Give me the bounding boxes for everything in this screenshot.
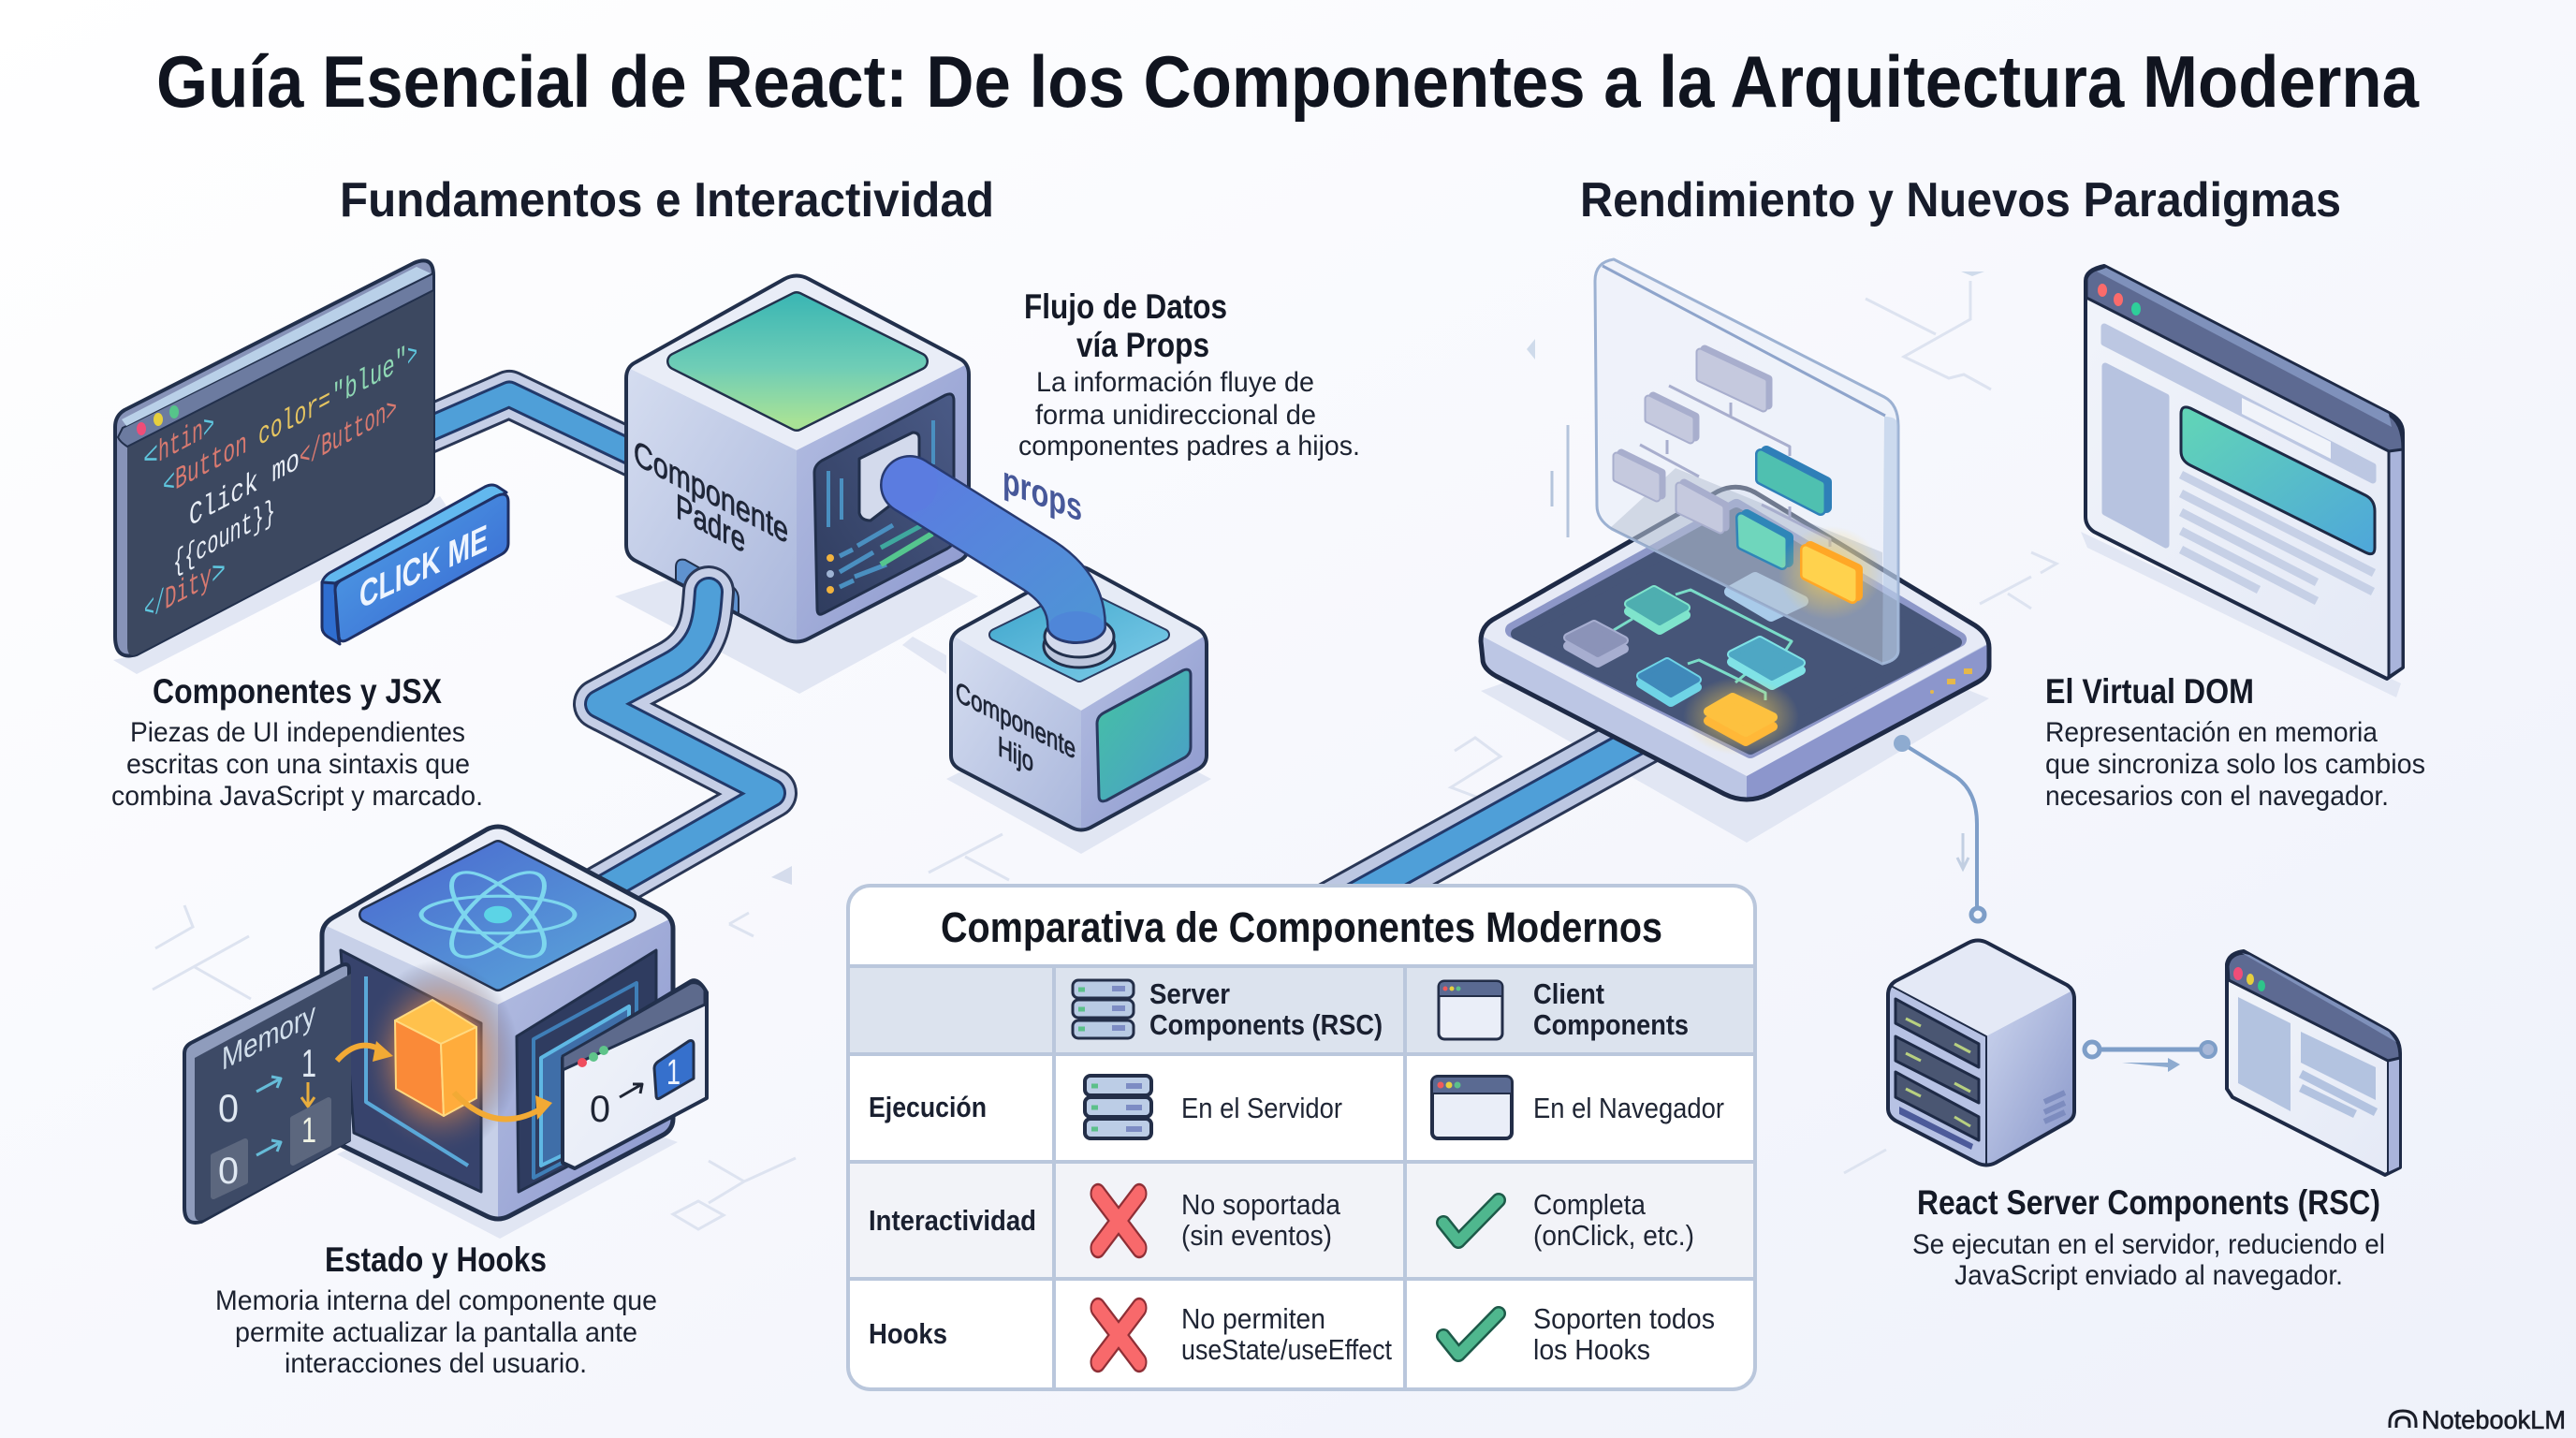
label: componente hijo: Hijo <box>998 729 1033 779</box>
text block: virtual dom: Representación en memoria <box>2045 717 2378 748</box>
tree node: dark teal <box>1761 451 1826 510</box>
text block: estado y hooks: Estado y Hooks <box>325 1240 547 1279</box>
row: hooks: useState/useEffect <box>1181 1333 1392 1366</box>
icon: click me button <box>322 485 508 644</box>
text block: flujo de datos: componentes padres a hijos. <box>1018 431 1360 462</box>
text block: virtual dom: que sincroniza solo los cambios <box>2045 749 2425 780</box>
text block: flujo de datos: forma unidireccional de <box>1035 400 1316 431</box>
panel: memory: Memory <box>222 994 315 1078</box>
header: server components: Server <box>1149 977 1230 1010</box>
text block: react server components: JavaScript enviado al navegador. <box>1954 1260 2343 1291</box>
row: hooks: los Hooks <box>1533 1333 1650 1366</box>
code text: > <box>212 551 226 594</box>
icon: green check <box>1443 1313 1499 1355</box>
header: client components <box>1439 977 1689 1041</box>
text block: react server components <box>1912 1183 2385 1291</box>
text block: react server components: Se ejecutan en el servidor, reduciendo el <box>1912 1229 2385 1260</box>
watermark: notebooklm: NotebookLM <box>2422 1405 2566 1434</box>
header: client components: Client <box>1533 977 1604 1010</box>
row: hooks: Hooks <box>869 1317 947 1350</box>
text block: flujo de datos: Flujo de Datos <box>1024 287 1227 326</box>
code text: > <box>407 335 417 376</box>
row: ejecucion: En el Navegador <box>1533 1092 1724 1124</box>
panel: virtual dom glass layer <box>1595 259 1898 664</box>
panel: memory: 0 <box>218 1151 239 1192</box>
icon: server <box>1881 936 2078 1170</box>
label: props: props <box>1003 458 1082 530</box>
code text: "blue" <box>332 341 407 416</box>
code text: Button <box>175 426 247 499</box>
code text: Click mo <box>189 442 300 536</box>
panel: memory <box>184 964 351 1223</box>
icon: red cross <box>1098 1308 1139 1362</box>
header: server components <box>1073 977 1383 1041</box>
code text: htin <box>158 413 203 472</box>
arrow: memory to hook <box>337 1046 386 1061</box>
text block: componentes y jsx: Piezas de UI independientes <box>130 717 465 748</box>
text block: virtual dom: necesarios con el navegador. <box>2045 781 2389 812</box>
code text: {{count}} <box>173 493 275 582</box>
node: mid blue <box>1732 640 1801 685</box>
node: blue <box>1641 662 1697 702</box>
label: componente hijo: Componente <box>956 675 1076 766</box>
node: yellow <box>1683 677 1799 756</box>
code text <box>143 299 417 630</box>
icon: orange hook cube <box>395 1000 476 1116</box>
text block: virtual dom <box>2045 672 2425 812</box>
label: componente padre: Componente <box>634 433 788 551</box>
code text: < <box>163 464 175 506</box>
panel: memory: 0 <box>218 1086 239 1130</box>
header: server components: Components (RSC) <box>1149 1008 1383 1041</box>
icon: react atom <box>421 864 575 965</box>
icon: red cross <box>1098 1194 1139 1248</box>
arrow: server to browser <box>2085 1042 2216 1072</box>
row: interactividad <box>869 1188 1694 1252</box>
node: ghost <box>1730 578 1803 616</box>
text block: flujo de datos <box>1018 287 1360 462</box>
row: interactividad: (sin eventos) <box>1181 1219 1332 1252</box>
pipe: window to parent component <box>421 394 637 455</box>
node: teal <box>1629 590 1686 630</box>
pipe: data path to virtual dom tablet <box>1329 719 1676 911</box>
heading: fundamentos: Fundamentos e Interactividad <box>340 173 994 227</box>
row: ejecucion: En el Servidor <box>1181 1092 1342 1124</box>
header: client components: Components <box>1533 1008 1689 1041</box>
code text: </Button> <box>300 390 397 477</box>
label: componente padre: Padre <box>676 487 745 561</box>
label: componente hijo <box>956 675 1076 779</box>
code text: < <box>143 436 158 479</box>
code text: </ <box>144 584 165 630</box>
text block: componentes y jsx: Componentes y JSX <box>153 672 442 711</box>
title: Guía Esencial de React: De los Componentes a la Arquitectura Moderna <box>156 40 2420 123</box>
row: interactividad: No soportada <box>1181 1188 1341 1221</box>
text block: componentes y jsx: combina JavaScript y marcado. <box>111 781 483 812</box>
table title: Comparativa de Componentes Modernos <box>941 903 1662 951</box>
tree node: yellow changed <box>1778 526 1881 620</box>
component: child cube <box>945 562 1212 838</box>
table: comparativa <box>848 886 1755 1389</box>
node: gray <box>1568 624 1624 663</box>
panel: result window <box>563 980 707 1168</box>
row: hooks: No permiten <box>1181 1302 1325 1335</box>
panel: result window: 0 <box>590 1089 610 1130</box>
arrow: tablet to server connector <box>1894 735 1984 921</box>
text block: componentes y jsx <box>111 672 483 812</box>
pipe: parent component to state cube <box>590 592 771 897</box>
panel: memory: 1 <box>301 1111 316 1151</box>
row: interactividad: Completa <box>1533 1188 1647 1221</box>
text block: flujo de datos: La información fluye de <box>1036 367 1314 398</box>
text block: estado y hooks <box>215 1240 657 1379</box>
row: ejecucion <box>869 1076 1724 1138</box>
row: interactividad: Interactividad <box>869 1204 1036 1237</box>
row: hooks: Soporten todos <box>1533 1302 1715 1335</box>
ground shadows <box>113 496 2401 1239</box>
text block: virtual dom: El Virtual DOM <box>2045 672 2254 711</box>
code text: > <box>203 406 214 448</box>
panel: memory: 1 <box>301 1041 316 1085</box>
component: parent cube <box>618 267 978 651</box>
icon: green check <box>1443 1200 1499 1241</box>
heading: rendimiento: Rendimiento y Nuevos Paradigmas <box>1580 173 2341 227</box>
text block: estado y hooks: permite actualizar la pantalla ante <box>235 1317 637 1348</box>
component: state and hooks cube <box>184 819 707 1226</box>
icon: code editor window <box>115 260 433 655</box>
tree nodes: ghost components <box>1617 349 1768 530</box>
tree node: light teal <box>1741 515 1788 565</box>
icon: browser rsc <box>2227 951 2400 1175</box>
text block: componentes y jsx: escritas con una sintaxis que <box>126 749 470 780</box>
arrow: props pipe <box>880 455 1115 668</box>
row: hooks <box>869 1302 1715 1366</box>
panel: result window: 1 <box>666 1053 681 1093</box>
text block: flujo de datos: vía Props <box>1076 326 1209 364</box>
arrow: hook to screen <box>454 1093 545 1119</box>
icon: browser virtual dom <box>2086 266 2403 679</box>
text block: estado y hooks: Memoria interna del componente que <box>215 1285 657 1316</box>
text block: react server components: React Server Components (RSC) <box>1917 1183 2380 1222</box>
text block: estado y hooks: interacciones del usuario. <box>285 1348 587 1379</box>
icon: click me button: CLICK ME <box>359 516 488 617</box>
code text: Dity <box>165 559 212 619</box>
row: ejecucion: Ejecución <box>869 1091 987 1123</box>
component: tablet with rendered tree <box>1474 477 1998 810</box>
row: interactividad: (onClick, etc.) <box>1533 1219 1694 1252</box>
code text: color= <box>258 382 330 455</box>
